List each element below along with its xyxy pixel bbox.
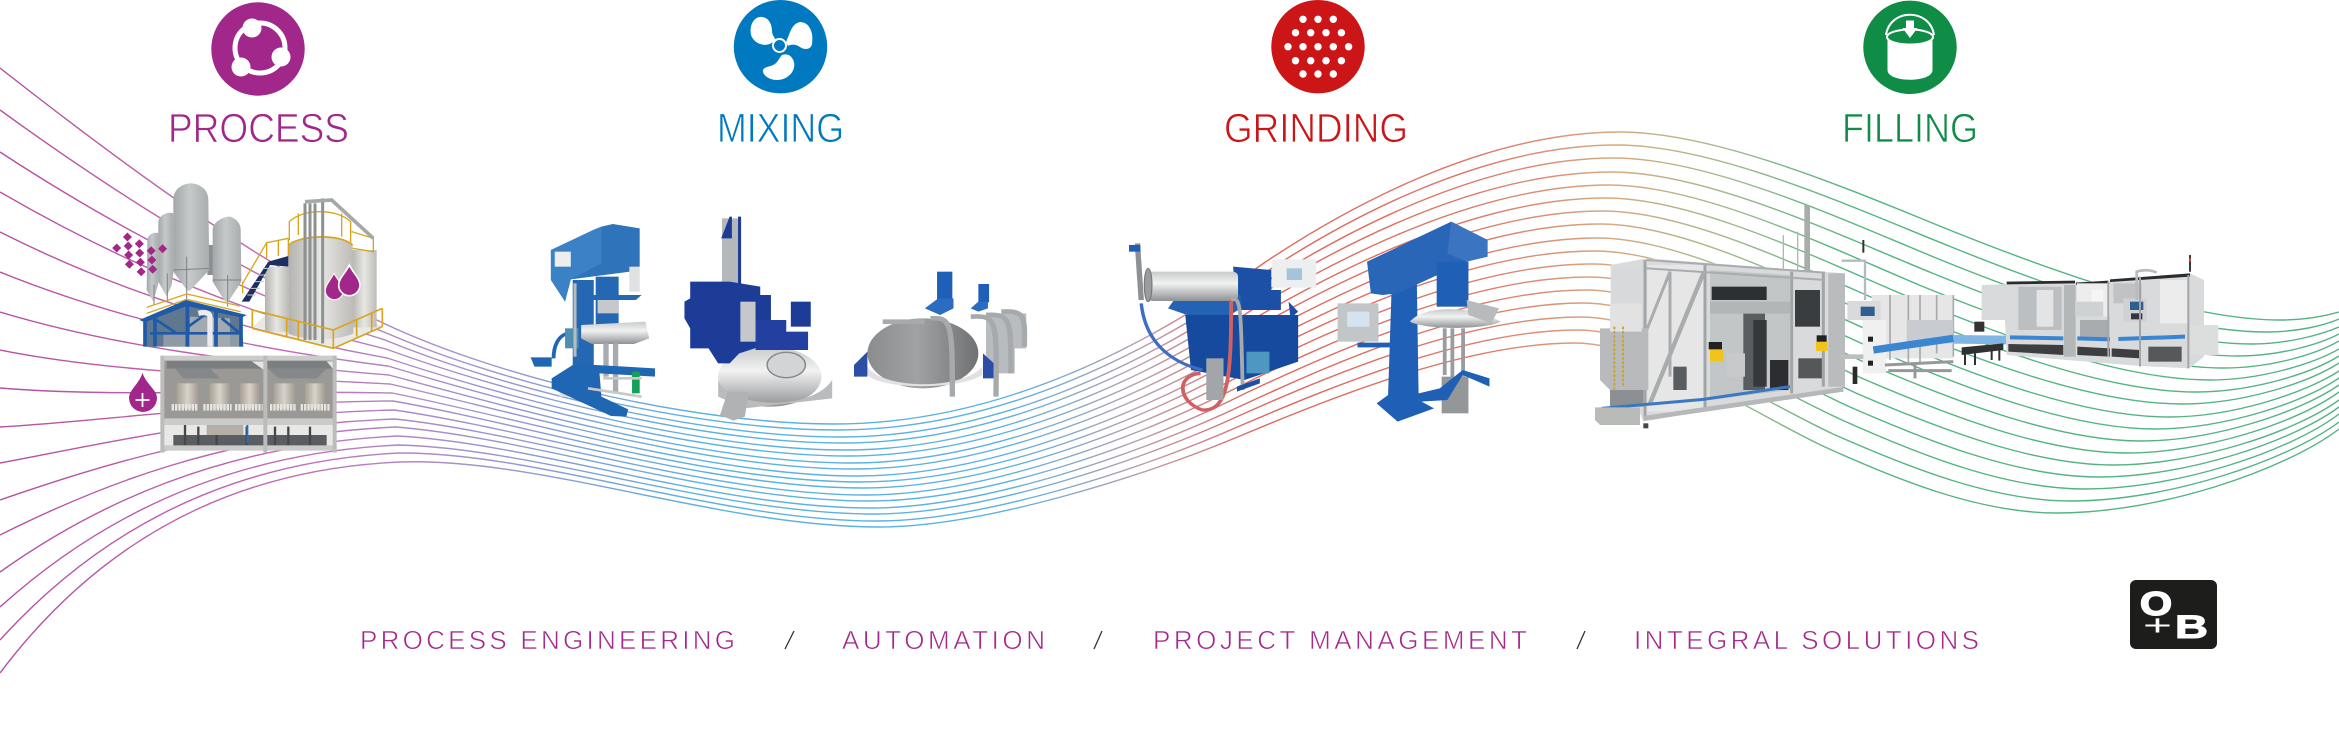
dispersion mixer xyxy=(531,224,655,417)
storage tanks xyxy=(242,198,382,348)
logo: O+B: O xyxy=(2140,585,2172,622)
separator xyxy=(1577,631,1585,649)
machine: first filling line xyxy=(1595,205,1845,428)
tagline xyxy=(360,625,1979,655)
domed vessel xyxy=(854,272,1026,397)
filling module xyxy=(1982,270,2218,368)
logo: O+B: + xyxy=(2143,610,2172,642)
section: filling xyxy=(1595,1,2218,428)
vessel with agitators xyxy=(684,217,832,421)
icon: process circle xyxy=(211,2,305,96)
icon: powder particles xyxy=(112,232,167,276)
machines: silos, tanks and dosing skid xyxy=(139,183,382,453)
section: process xyxy=(112,2,382,453)
heading: process: PROCESS xyxy=(168,105,349,151)
tagline: automation: AUTOMATION xyxy=(842,625,1045,655)
bead mill xyxy=(1129,243,1316,410)
icon: mixing fan xyxy=(734,0,827,93)
dosing skid xyxy=(162,356,337,453)
separator xyxy=(1094,631,1102,649)
machines: bead mill and dissolver xyxy=(1129,222,1501,422)
tagline: process engineering: PROCESS ENGINEERING xyxy=(360,625,735,655)
conveyor and table xyxy=(1954,322,2007,365)
icon: paint bucket xyxy=(1863,1,1957,94)
separator xyxy=(785,631,794,649)
tagline: project management: PROJECT MANAGEMENT xyxy=(1153,625,1527,655)
icon: drop with plus xyxy=(129,373,157,412)
logo: O+B xyxy=(2130,580,2217,649)
logo: O+B: B xyxy=(2175,609,2208,645)
icon: liquid drops xyxy=(325,265,360,300)
dissolver xyxy=(1338,222,1501,422)
tagline: integral solutions: INTEGRAL SOLUTIONS xyxy=(1634,625,1979,655)
labeller module xyxy=(1840,261,1953,384)
heading: mixing: MIXING xyxy=(717,105,844,151)
icon: grinding beads xyxy=(1271,0,1365,93)
signal light stacks xyxy=(1862,240,2191,272)
machines: second filling line xyxy=(1840,240,2218,384)
heading: grinding: GRINDING xyxy=(1224,105,1408,151)
section: grinding xyxy=(1129,0,1501,422)
silos xyxy=(147,183,241,313)
section: mixing xyxy=(531,0,1026,421)
blue support frame xyxy=(139,300,247,347)
machines: mixers and vessels xyxy=(531,217,1026,421)
heading: filling: FILLING xyxy=(1842,105,1978,151)
